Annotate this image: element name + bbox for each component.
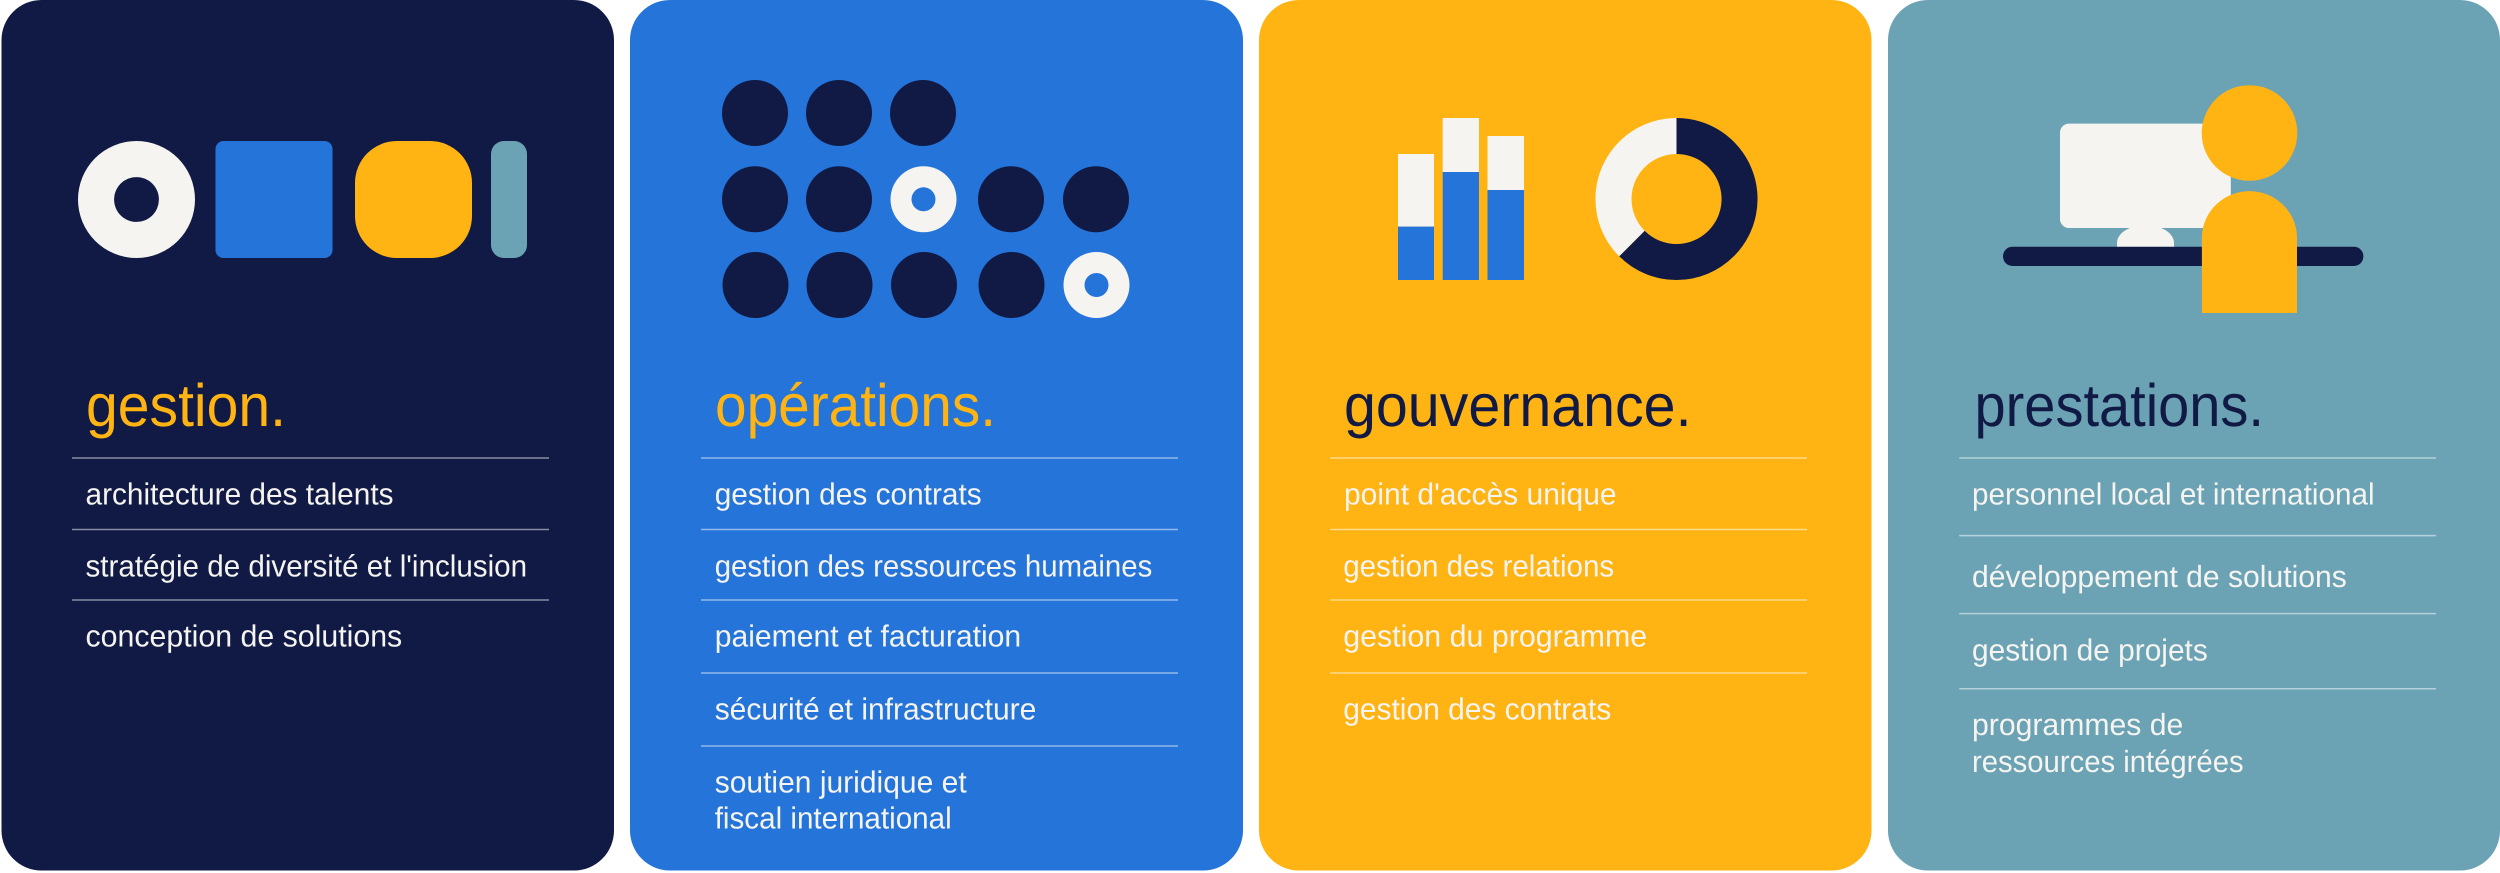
list: prestations items: ressources intégrées (1972, 745, 2244, 779)
icon: dot grid (722, 80, 1130, 318)
list: gestion items: conception de solutions (86, 620, 402, 654)
list: gouvernance items (1343, 478, 1647, 726)
heading: prestations: prestations. (1974, 372, 2264, 439)
list: gouvernance items: point d'accès unique (1344, 478, 1617, 512)
list: prestations items (1972, 478, 2375, 779)
heading: gestion: gestion. (86, 372, 286, 439)
list: prestations items: gestion de projets (1972, 634, 2208, 668)
list: opérations items: paiement et facturation (715, 620, 1021, 654)
panel: opérations (630, 0, 1243, 870)
icon: donut chart (1595, 118, 1758, 280)
list: gestion items (86, 478, 527, 654)
list: opérations items: gestion des ressources humaines (715, 549, 1152, 583)
heading: opérations: opérations. (715, 372, 996, 439)
panel: prestations (1888, 0, 2500, 870)
list: opérations items: gestion des contrats (715, 478, 982, 512)
heading: gouvernance: gouvernance. (1344, 372, 1692, 439)
list: opérations items: sécurité et infrastructure (715, 692, 1036, 726)
list: opérations items: fiscal international (715, 802, 952, 836)
list: gouvernance items: gestion des relations (1343, 549, 1614, 583)
panel: gouvernance (1259, 0, 1872, 870)
list: prestations items: développement de solutions (1972, 560, 2347, 594)
icon: person at computer (2003, 85, 2363, 313)
list: opérations items: soutien juridique et (715, 765, 967, 799)
list: gouvernance items: gestion du programme (1343, 620, 1647, 654)
icon: geometric shapes (78, 141, 527, 258)
list: gestion items: architecture des talents (86, 478, 394, 512)
list: opérations items (715, 478, 1152, 836)
list: prestations items: personnel local et international (1972, 478, 2375, 512)
list: gouvernance items: gestion des contrats (1343, 692, 1611, 726)
list: prestations items: programmes de (1972, 708, 2183, 742)
panel: gestion (2, 0, 614, 870)
list: gestion items: stratégie de diversité et l'inclusion (86, 549, 527, 583)
icon: stacked bar chart (1398, 118, 1524, 280)
